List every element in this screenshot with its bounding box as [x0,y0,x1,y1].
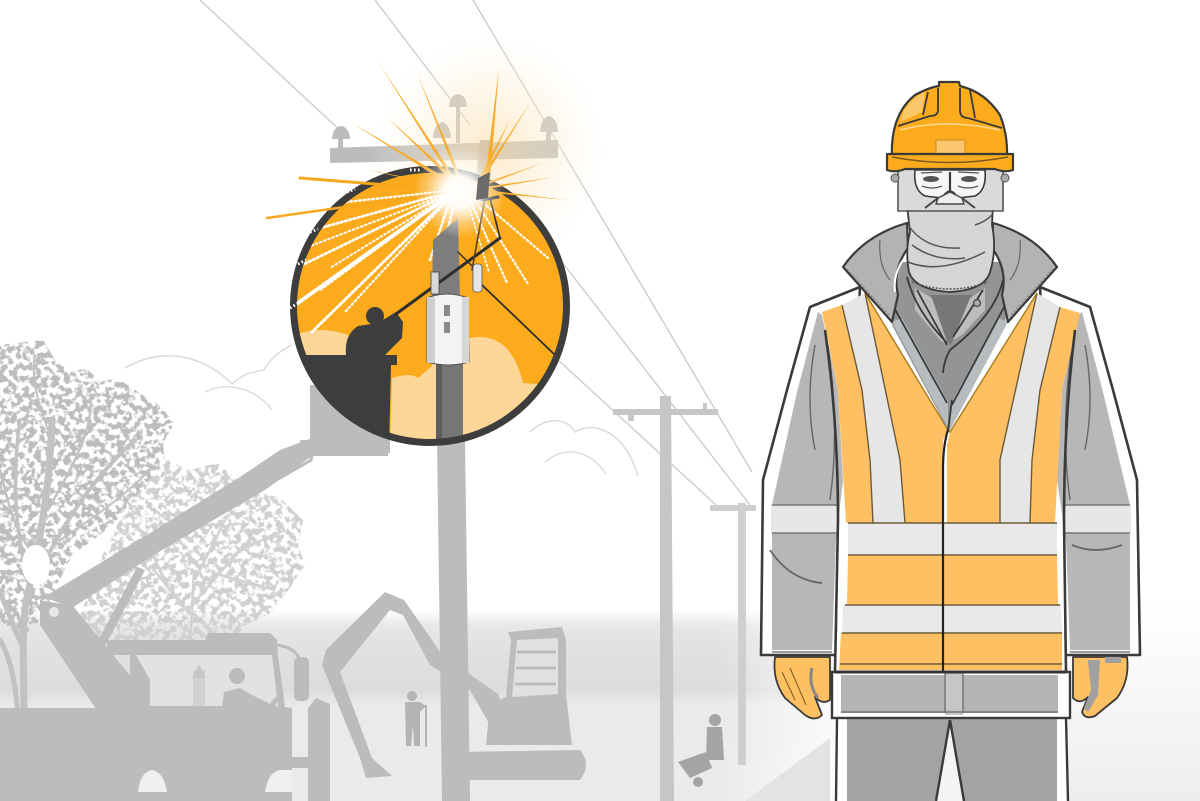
utility pole: main with crossarm [330,94,558,801]
bucket and lineman silhouette [306,307,403,433]
neck gaiter [907,205,994,292]
tree: background [70,460,305,645]
jacket collar right [992,223,1057,322]
tree: foreground [0,340,174,720]
excavator [322,592,586,780]
trousers [835,716,1068,801]
high-visibility vest [822,293,1080,672]
arc flash halo [365,25,615,275]
jacket collar left [843,223,908,322]
aerial lift boom [40,385,390,730]
hot stick and wires [396,197,555,355]
worker figure in protective clothing [761,82,1140,801]
sparkle dots on rim [290,170,420,308]
jacket hem [832,672,1070,718]
orange sky disc [294,170,566,442]
utility pole: far [710,503,756,765]
worker with shovel [405,691,427,747]
circular scene: worker and arc flash [288,170,566,450]
cloud outlines [125,345,638,476]
glove right [1073,657,1128,717]
utility truck [0,633,330,801]
inner jacket and shirt [877,262,1020,430]
utility pole: middle [613,396,718,801]
right sleeve [1040,287,1140,655]
disc outline [294,170,566,442]
pale clouds [300,330,538,439]
power lines [200,0,752,505]
pole section [432,218,463,450]
dotted flash rays [288,190,548,332]
flash core [414,146,506,238]
arc flash sparks [267,60,567,238]
glove left [774,657,830,718]
face and safety goggles [891,168,1009,211]
left sleeve [761,287,860,655]
transformer [427,264,482,365]
hard hat [887,82,1013,171]
worker with wheelbarrow [678,714,724,787]
